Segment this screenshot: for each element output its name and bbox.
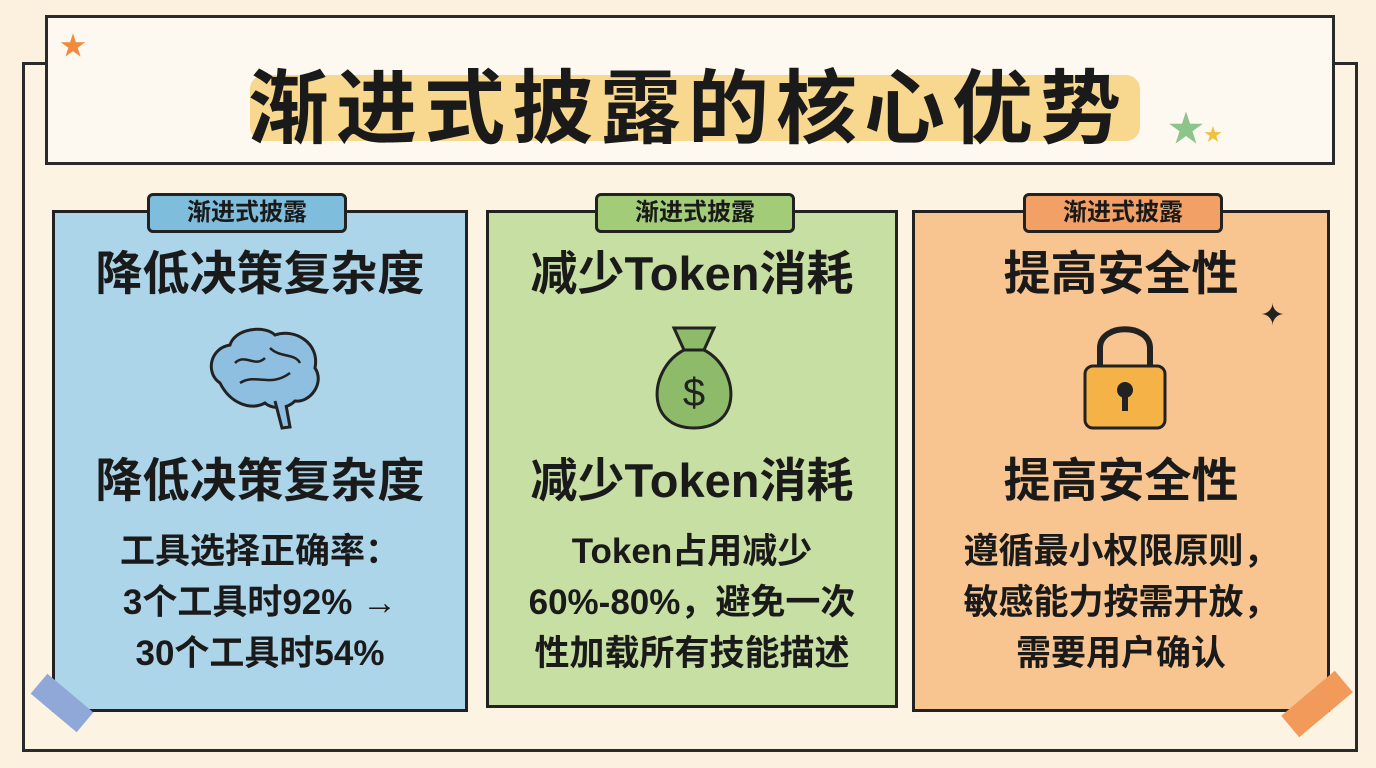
icon: star orange: ★ bbox=[60, 31, 86, 61]
subheading: 提高安全性 bbox=[1004, 454, 1238, 507]
title box bbox=[45, 15, 1335, 165]
heading: 提高安全性 bbox=[1004, 247, 1238, 300]
icon: stars green: ★★ bbox=[1168, 108, 1222, 149]
panel: green bbox=[486, 210, 898, 708]
title: 渐进式披露的核心优势 bbox=[248, 65, 1128, 155]
icon: money bag bbox=[656, 326, 732, 430]
tag: 渐进式披露 bbox=[187, 199, 307, 226]
subheading: 降低决策复杂度 bbox=[96, 454, 424, 507]
panel: orange bbox=[912, 210, 1330, 712]
tag: 渐进式披露 bbox=[635, 199, 755, 226]
body text: 敏感能力按需开放， bbox=[963, 583, 1278, 622]
heading: 降低决策复杂度 bbox=[96, 247, 424, 300]
panel: blue bbox=[52, 210, 468, 712]
body text: Token占用减少 bbox=[572, 532, 812, 571]
title highlight bbox=[250, 75, 1140, 141]
body text bbox=[529, 532, 855, 673]
tag: 渐进式披露 bbox=[1063, 199, 1183, 226]
body text: 3个工具时92% → bbox=[123, 583, 397, 622]
icon: sparkle: ✦ bbox=[1260, 299, 1285, 332]
body text: 遵循最小权限原则， bbox=[963, 532, 1278, 571]
tag bbox=[595, 193, 795, 233]
tape: orange bbox=[1281, 671, 1353, 737]
body text bbox=[963, 532, 1278, 673]
tag bbox=[147, 193, 347, 233]
body text: 需要用户确认 bbox=[1016, 634, 1226, 673]
body text: 30个工具时54% bbox=[136, 634, 384, 673]
heading: 减少Token消耗 bbox=[531, 247, 853, 300]
body text: 工具选择正确率： bbox=[120, 532, 400, 571]
tape: blue bbox=[31, 674, 93, 732]
tag bbox=[1023, 193, 1223, 233]
icon: padlock bbox=[1084, 326, 1166, 430]
body text: 60%-80%，避免一次 bbox=[529, 583, 855, 622]
subheading: 减少Token消耗 bbox=[531, 454, 853, 507]
body text: 性加载所有技能描述 bbox=[534, 634, 850, 673]
icon: money bag: $ bbox=[683, 371, 705, 415]
body text bbox=[120, 532, 400, 673]
icon: brain bbox=[210, 328, 320, 430]
